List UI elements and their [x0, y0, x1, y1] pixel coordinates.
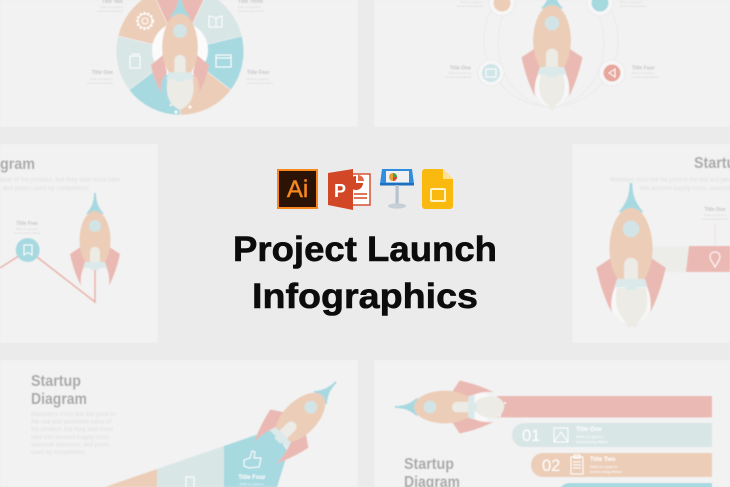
icon: book — [209, 16, 222, 27]
panel: arrow bar rocket diagram — [596, 156, 730, 322]
node: title two — [492, 0, 512, 14]
description: the real and perceived value of — [31, 419, 111, 426]
icon: Adobe Illustrator: Ai — [287, 176, 308, 203]
label: title two: Refer to a good or — [100, 5, 123, 9]
label: title four: service being offered — [632, 75, 658, 79]
rocket — [522, 0, 582, 110]
label: title four: Refer to a good or — [247, 77, 270, 81]
label: title four: Title Four — [247, 70, 270, 76]
label: title three — [238, 0, 264, 12]
title: Infographics — [252, 277, 478, 316]
description: Marketers must link the price to — [31, 411, 116, 418]
description: the product, but they also must — [31, 426, 113, 433]
icon: thumbs up — [244, 451, 261, 468]
icon: PowerPoint: P — [334, 181, 346, 201]
label: title three: service being offered — [238, 9, 264, 13]
node: title one — [482, 63, 500, 82]
label: title one: service being offered — [445, 75, 471, 79]
label: title four — [247, 70, 273, 85]
label: title one: Refer to a good or — [448, 71, 471, 75]
bar: 02: service being offered — [590, 470, 622, 474]
label: title two — [98, 0, 123, 12]
rocket — [596, 183, 666, 327]
panel: line path rocket diagram — [0, 160, 120, 304]
label: title four — [238, 475, 266, 486]
bar: 02: Title Two — [590, 457, 616, 463]
label: title two: Refer to a good or — [460, 0, 483, 4]
bar: 03 — [558, 483, 712, 487]
donut chart — [116, 0, 244, 115]
bar: 01: Title One — [576, 427, 602, 433]
bar: pink — [497, 396, 712, 418]
heading: Startup — [31, 373, 81, 390]
panel: diagonal trail rocket diagram — [32, 374, 337, 487]
title: Project Launch — [233, 230, 497, 269]
icon: gear — [137, 13, 153, 29]
label: title one: Title One — [450, 66, 471, 72]
panel: stacked bar rocket diagram — [374, 360, 730, 487]
heading: Diagram — [31, 391, 87, 408]
bar: 01: 01 — [522, 427, 540, 445]
panel: orbit rocket diagram — [450, 0, 654, 106]
icon: Google Slides — [422, 169, 453, 209]
description: seasonal discounts, and prices — [31, 441, 111, 448]
icon: Keynote — [380, 169, 414, 209]
orbit rings — [484, 0, 618, 107]
label: title one: Title One — [704, 207, 726, 213]
bar: 01: Refer to a good or — [576, 435, 604, 439]
panel: donut rocket diagram — [92, 0, 270, 115]
rocket — [246, 363, 355, 472]
label: title one — [702, 207, 728, 221]
label: title four — [632, 66, 658, 79]
label: title three: Refer to a good or — [620, 0, 643, 4]
label: title four: Refer to a good or — [240, 482, 264, 486]
label: title one — [445, 66, 471, 79]
label: title one: service being offered — [87, 81, 113, 85]
heading — [31, 373, 87, 408]
label: title one: Refer to a good or — [90, 77, 113, 81]
bar: 02: Refer to a good or — [590, 465, 618, 469]
label: title three — [620, 2, 646, 7]
icon: document — [130, 54, 140, 68]
label: title one — [87, 70, 113, 85]
description: and prices used by competitors. — [3, 185, 90, 192]
label: title three: service being offered — [620, 4, 646, 8]
description — [31, 411, 116, 456]
heading: Startup — [404, 456, 454, 473]
node: title three — [590, 0, 610, 12]
rocket — [151, 0, 209, 114]
heading: gram — [0, 156, 35, 173]
connector — [714, 224, 716, 246]
bar: 01 — [512, 423, 712, 447]
rocket — [70, 193, 120, 286]
node: title four — [603, 64, 621, 82]
label: title two: service being offered — [457, 4, 483, 8]
label: title four: service being offered — [247, 81, 273, 85]
label: title five: service being offered — [14, 231, 40, 235]
description: alue of the product, but they also must take — [0, 176, 120, 184]
bar: pink segment — [686, 246, 730, 272]
label: title two — [458, 2, 482, 7]
bar: 02 — [531, 453, 712, 477]
trail: light segment — [157, 446, 224, 487]
label: title four: Title Four — [632, 66, 655, 72]
heading — [404, 456, 460, 487]
icon: Adobe Illustrator — [278, 170, 317, 208]
trail: peach segment — [105, 469, 157, 487]
description: take into account supply costs, — [31, 434, 111, 441]
label: title five: Title Five — [16, 221, 38, 227]
trail: blue segment — [224, 429, 288, 487]
icon: PowerPoint — [328, 169, 370, 210]
description: used by competitors. — [31, 449, 86, 456]
description — [610, 178, 726, 190]
label: title one: Refer to a good or — [704, 213, 726, 217]
icon: folder — [216, 55, 231, 67]
icon: document — [186, 477, 194, 487]
icon: map pin — [710, 252, 720, 267]
node: title five — [16, 238, 40, 262]
bar: 02: 02 — [542, 457, 560, 475]
label: title five: Refer to a good or — [16, 227, 38, 231]
description — [2, 178, 118, 190]
label: title five — [14, 221, 40, 235]
label: title four: Refer to a good or — [632, 71, 655, 75]
line path — [0, 250, 95, 302]
bar: 01: service being offered — [576, 440, 608, 444]
label: title three: Refer to a good or — [238, 5, 261, 9]
bar: light segment — [652, 248, 688, 272]
label: title two: service being offered — [97, 9, 123, 13]
label: title one: service being offered — [702, 217, 728, 221]
rocket — [395, 380, 506, 434]
title — [233, 230, 497, 316]
label: title one: Title One — [92, 70, 113, 76]
label: title four: Title Four — [238, 475, 266, 481]
